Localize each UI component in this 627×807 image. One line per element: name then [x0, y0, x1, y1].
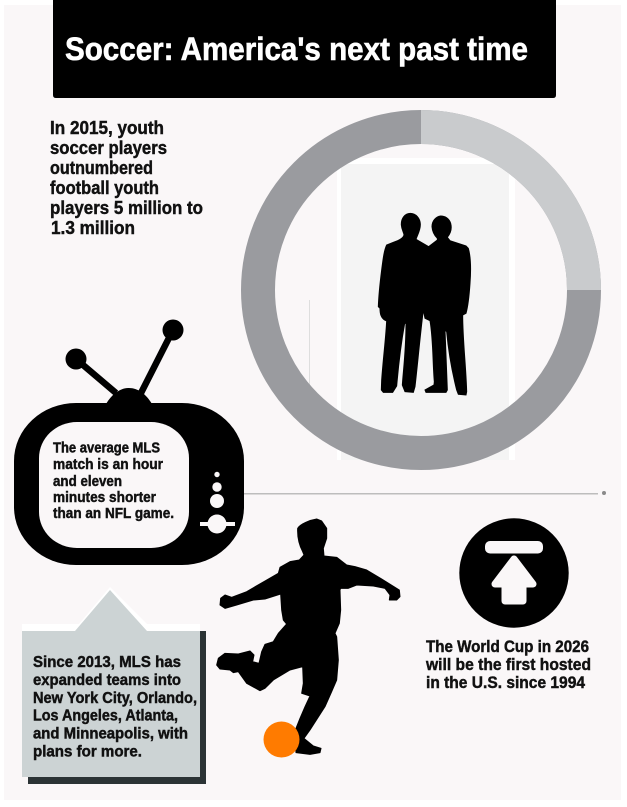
- title banner: Soccer: America's next past time: [65, 31, 528, 67]
- title banner: [53, 0, 556, 98]
- text: MLS match length: and eleven: [53, 474, 122, 490]
- callout: MLS expansion: [22, 587, 206, 784]
- text: MLS match length: The average MLS: [53, 440, 160, 456]
- text: World Cup 2026: will be the first hosted: [425, 656, 591, 674]
- text: MLS match length: than an NFL game.: [53, 506, 174, 522]
- callout: MLS expansion: Since 2013, MLS has: [33, 654, 181, 671]
- connector line with end dot: [243, 491, 606, 495]
- donut chart: [258, 127, 584, 453]
- icon: soccer player silhouette: [217, 519, 400, 754]
- text: World Cup 2026: [425, 638, 591, 692]
- text: MLS match length: minutes shorter: [53, 490, 156, 506]
- icon: upward arrow in circle: [459, 518, 569, 628]
- callout: MLS expansion: expanded teams into: [33, 672, 181, 689]
- icon: television: [14, 320, 244, 565]
- text: World Cup 2026: in the U.S. since 1994: [426, 674, 586, 692]
- text: youth players statistic: In 2015, youth: [50, 118, 164, 138]
- callout: MLS expansion: plans for more.: [33, 744, 142, 760]
- text: youth players statistic: soccer players: [50, 138, 167, 158]
- text: World Cup 2026: The World Cup in 2026: [426, 638, 589, 656]
- text: youth players statistic: 1.3 million: [51, 218, 135, 238]
- text: MLS match length: match is an hour: [53, 457, 163, 473]
- callout: MLS expansion: Los Angeles, Atlanta,: [33, 708, 178, 724]
- text: youth players statistic: players 5 million to: [50, 198, 203, 218]
- icon: two men silhouette: [378, 213, 471, 395]
- text: MLS match length: [53, 440, 174, 522]
- text: youth players statistic: football youth: [50, 178, 159, 198]
- callout: MLS expansion: and Minneapolis, with: [33, 726, 188, 742]
- text: youth players statistic: outnumbered: [50, 158, 153, 178]
- photo panel behind donut: [337, 158, 515, 460]
- text: youth players statistic: [50, 118, 203, 238]
- icon: orange soccer ball: [264, 722, 300, 758]
- callout: MLS expansion: New York City, Orlando,: [33, 690, 197, 707]
